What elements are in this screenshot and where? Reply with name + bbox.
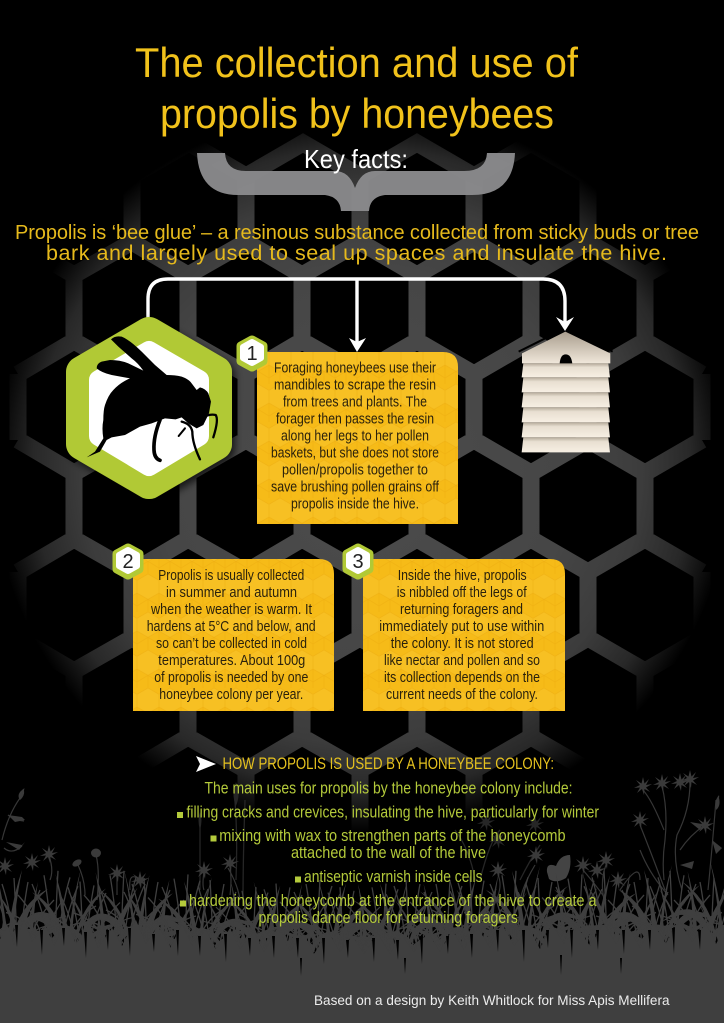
curly brace [197,153,515,211]
panel: step 1: from trees and plants. The [283,395,427,411]
honeycomb background [18,143,702,836]
key facts label: Key facts: [304,144,408,174]
panel: step 1: propolis inside the hive. [291,496,419,512]
credit: Based on a design by Keith Whitlock for Miss Apis Mellifera [314,992,670,1008]
title [135,39,578,137]
uses list [177,780,599,927]
badge 1: 1 [246,343,258,365]
panel: step 2: when the weather is warm. It [150,602,312,618]
uses list: antiseptic varnish inside cells [304,868,482,886]
panel: step 2: so can’t be collected in cold [156,636,307,652]
arrows [148,279,574,352]
panel: step 1: along her legs to her pollen [281,429,429,445]
section heading: HOW PROPOLIS IS USED BY A HONEYBEE COLONY: [222,755,554,773]
uses list: The main uses for propolis by the honeybee colony include: [204,780,572,798]
uses list: hardening the honeycomb at the entrance of the hive to create a [189,892,597,910]
panel: step 1: forager then passes the resin [276,412,434,428]
dark slits between grass blades [15,925,701,976]
panel: step 3: Inside the hive, propolis [398,568,527,584]
badge 1 [241,340,263,367]
icon: bee [82,333,217,483]
panel: step 1: save brushing pollen grains off [271,479,440,495]
title: propolis by honeybees [160,90,554,137]
panel: step 3: is nibbled off the legs of [397,585,527,601]
panel: step 2: of propolis is needed by one [154,670,308,686]
badge 2 [117,548,139,575]
panel: step 2: Propolis is usually collected [158,568,304,584]
intro text: bark and largely used to seal up spaces and insulate the hive. [46,241,667,265]
uses list: attached to the wall of the hive [291,844,486,862]
butterfly [547,855,570,881]
badge 2: 2 [122,551,134,573]
meadow silhouette [0,770,724,1023]
intro text: Propolis is ‘bee glue’ – a resinous substance collected from sticky buds or tree [15,222,699,244]
panel: step 3: its collection depends on the [384,670,540,686]
badge 3: 3 [352,551,364,573]
panel: step 3 [363,559,565,711]
panel: step 1: pollen/propolis together to [282,462,428,478]
panel: step 3: like nectar and pollen and so [384,653,540,669]
panel: step 3: current needs of the colony. [386,687,538,703]
panel: step 2: honeybee colony per year. [159,687,303,703]
panel: step 1: mandibles to scrape the resin [274,378,436,394]
panel: step 1 [257,352,458,524]
panel: step 3: immediately put to use within [379,619,544,635]
panel: step 2 [133,559,334,711]
uses list: mixing with wax to strengthen parts of the honeycomb [219,827,566,845]
panel: step 3: returning foragers and [400,602,523,618]
uses list: propolis dance floor for returning foragers [258,909,518,927]
title: The collection and use of [135,39,578,86]
badge 3 [347,548,369,575]
panel: step 1: Foraging honeybees use their [274,361,436,377]
panel: step 2: hardens at 5°C and below, and [147,619,316,635]
panel: step 2: temperatures. About 100g [158,653,305,669]
panel: step 3: the colony. It is not stored [391,636,534,652]
icon: white pointer arrow [196,756,216,772]
intro text [15,222,699,265]
uses list: filling cracks and crevices, insulating the hive, particularly for winter [186,804,599,822]
panel: step 1: baskets, but she does not store [271,445,439,461]
icon: hive [519,332,613,452]
panel: step 2: in summer and autumn [166,585,297,601]
